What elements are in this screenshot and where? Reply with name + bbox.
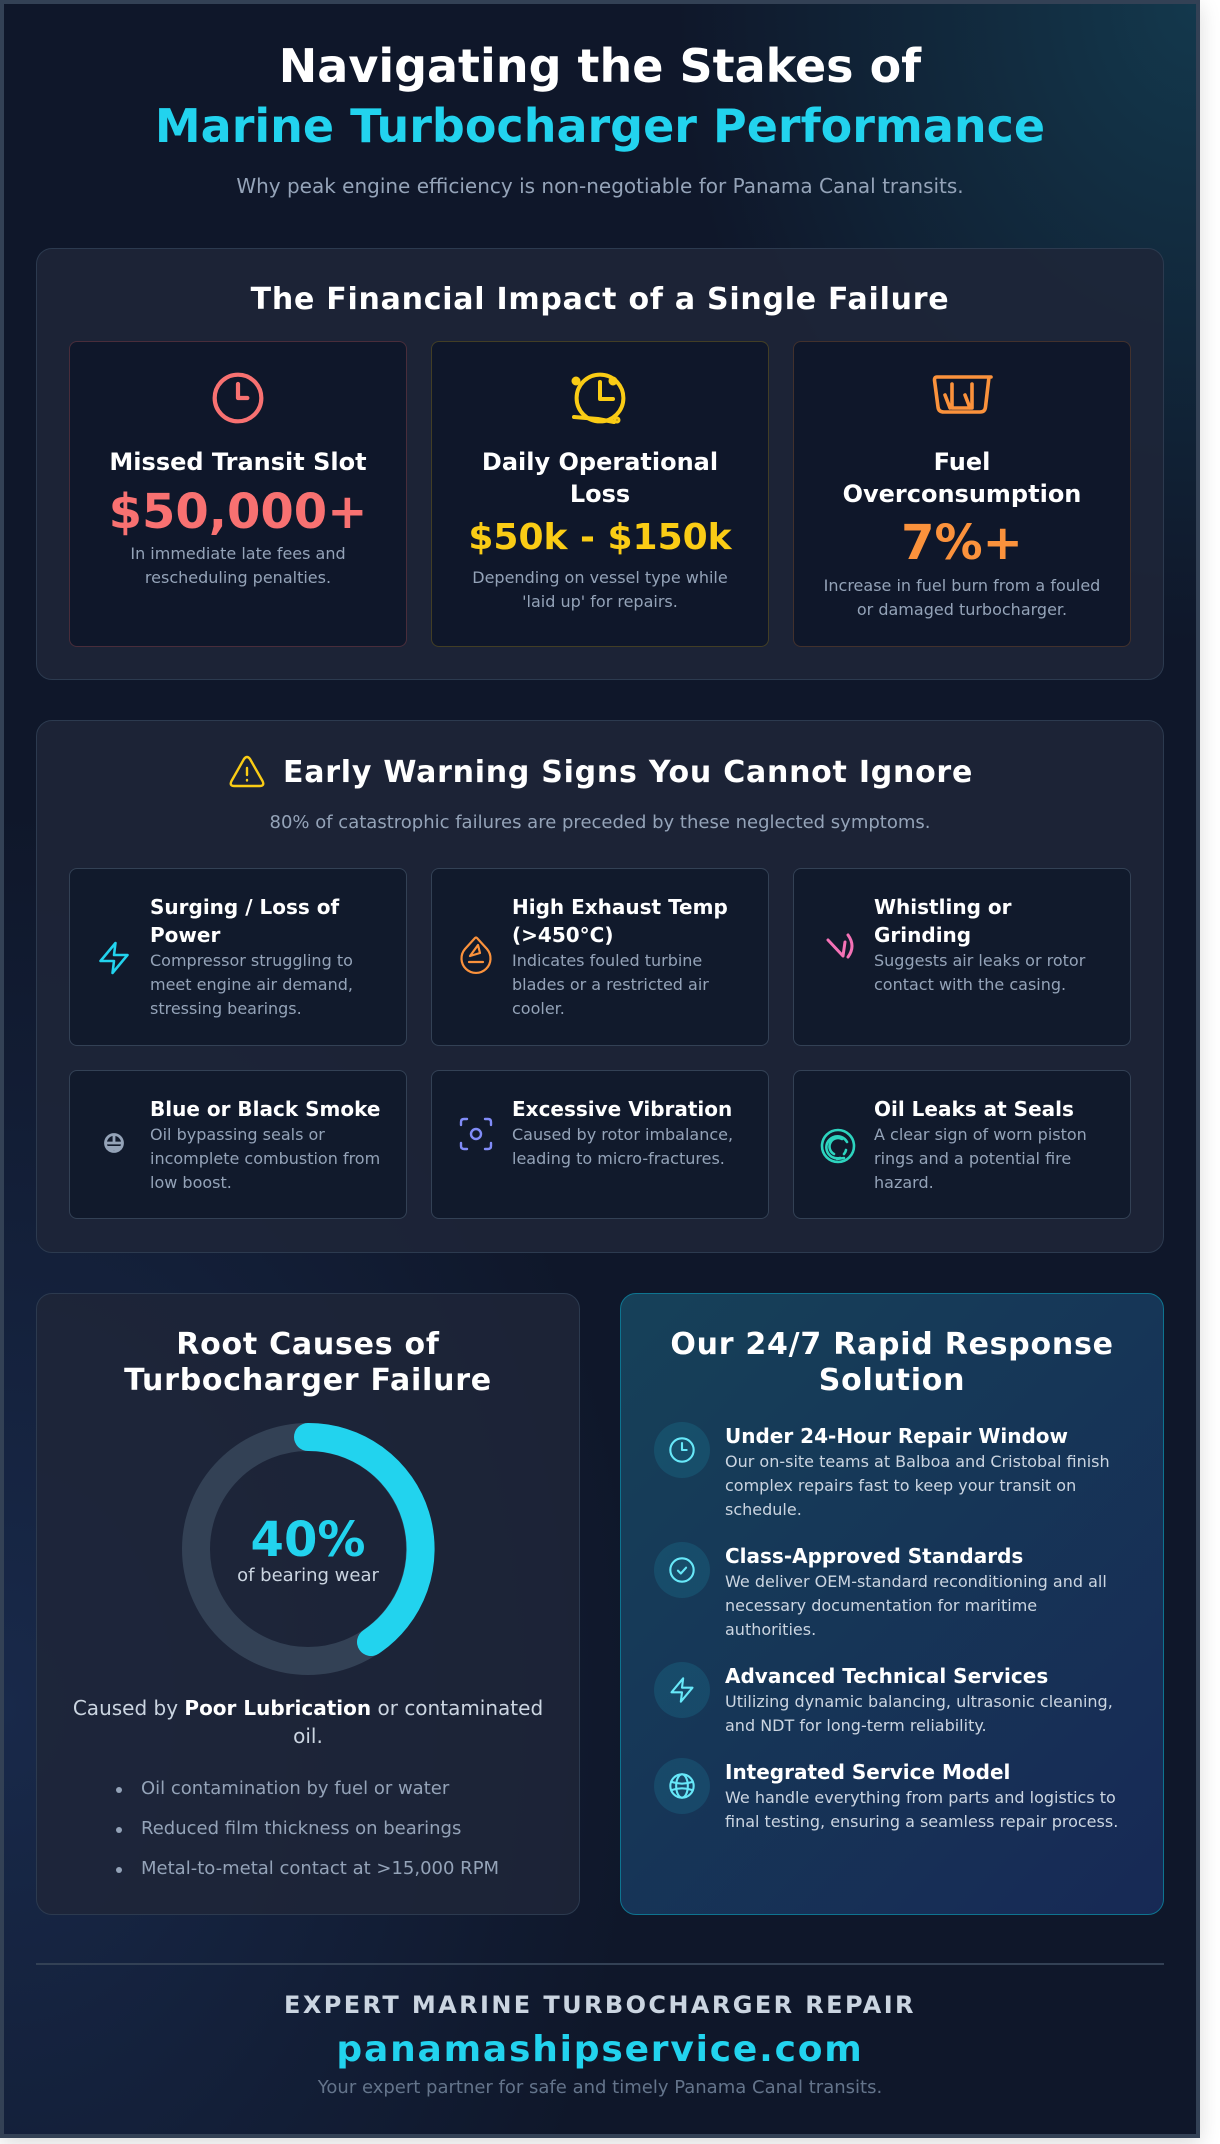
website: panamashipservice.com [336,2029,864,2070]
card: missed transit slot [69,341,407,647]
item: integrated service: Integrated Service Model [725,1760,1010,1784]
item: integrated service [654,1758,1118,1831]
item: class approved: necessary documentation for maritime [725,1596,1037,1615]
card: whistling: Whistling or Grinding [874,895,1011,947]
caption: Caused by Poor Lubrication or contaminated oil. [73,1696,543,1748]
heading: rapid response: Our 24/7 Rapid Response Solution [670,1327,1114,1398]
card: vibration: Caused by rotor imbalance, leading to micro-fractures. [512,1125,733,1168]
icon: warning triangle [230,756,264,788]
card: missed transit slot: Missed Transit Slot [109,448,367,476]
card: daily operational loss: Depending on vessel type while [472,568,728,587]
panel: early warning signs [36,720,1164,1253]
item: advanced technical [654,1662,1113,1735]
icon: fuel tank [932,375,993,414]
heading: root causes: Root Causes of [176,1327,440,1362]
card: daily operational loss [431,341,769,647]
title [155,39,1045,153]
card: vibration [431,1070,769,1219]
card: daily operational loss: Daily Operational [482,448,718,476]
card: fuel overconsumption: 7%+ [901,515,1023,571]
card: exhaust temp: Indicates fouled turbine blades or a restricted air cooler. [512,951,709,1018]
card: vibration: Excessive Vibration [512,1097,732,1121]
card: fuel overconsumption [793,341,1131,647]
bullet list [116,1778,499,1879]
card: oil leaks: A clear sign of worn piston rings and a potential fire hazard. [874,1125,1087,1192]
item: under 24-hour: schedule. [725,1500,802,1519]
card: oil leaks: Oil Leaks at Seals [874,1097,1074,1121]
card: missed transit slot: In immediate late fees and rescheduling penalties. [130,544,346,587]
card: smoke: Oil bypassing seals or incomplete combustion from low boost. [150,1125,380,1192]
footer note: Your expert partner for safe and timely Panama Canal transits. [318,2077,882,2098]
icon: clock [654,1422,710,1478]
item: advanced technical: Advanced Technical Services [725,1664,1048,1688]
panel: rapid response solution [620,1293,1164,1915]
card: whistling: Suggests air leaks or rotor contact with the casing. [874,951,1085,994]
icon: clock [212,372,264,424]
donut value: 40% [251,1512,365,1568]
heading: early warning signs: Early Warning Signs You Cannot Ignore [283,755,973,790]
item: class approved: We deliver OEM-standard reconditioning and all [725,1572,1107,1591]
donut label: of bearing wear [237,1565,379,1586]
card: exhaust temp [431,868,769,1046]
item: class approved [654,1542,1107,1639]
title: Marine Turbocharger Performance [155,99,1045,153]
bullet list: Oil contamination by fuel or water [141,1778,449,1799]
bullet list: Metal-to-metal contact at >15,000 RPM [141,1858,499,1879]
icon: seal rings [820,1128,856,1164]
heading: financial impact: The Financial Impact of a Single Failure [251,282,949,317]
subheading: 80% of catastrophic failures are preceded by these neglected symptoms. [270,812,930,833]
item: integrated service: final testing, ensuring a seamless repair process. [725,1812,1118,1831]
title: Navigating the Stakes of [279,39,921,93]
item: under 24-hour: Our on-site teams at Balboa and Cristobal finish [725,1452,1110,1471]
icon: flame gauge [460,936,492,974]
item: class approved: authorities. [725,1620,816,1639]
donut chart: 40 percent [182,1423,435,1675]
card: daily operational loss: $50k - $150k [468,517,732,558]
item: advanced technical: and NDT for long-term reliability. [725,1716,987,1735]
card: fuel overconsumption: Overconsumption [843,480,1081,508]
icon: bolt [99,942,129,974]
footer [36,1963,1164,2113]
item: under 24-hour: Under 24-Hour Repair Window [725,1424,1068,1448]
card: surging: Compressor struggling to meet engine air demand, stressing bearings. [150,951,353,1018]
item: under 24-hour [654,1422,1110,1519]
card: missed transit slot: $50,000+ [109,484,367,540]
icon: scan target [460,1118,492,1150]
icon: globe [654,1758,710,1814]
icon: smoke gauge [104,1133,124,1153]
card: whistling [793,868,1131,1046]
item: integrated service: We handle everything from parts and logistics to [725,1788,1116,1807]
card: surging: Surging / Loss of Power [150,895,339,947]
heading: root causes [124,1327,492,1398]
card: smoke: Blue or Black Smoke [150,1097,380,1121]
item: advanced technical: Utilizing dynamic balancing, ultrasonic cleaning, [725,1692,1113,1711]
card: smoke [69,1070,407,1219]
panel: financial impact [36,248,1164,680]
card: daily operational loss: 'laid up' for repairs. [522,592,678,611]
icon: bolt [654,1662,710,1718]
card: exhaust temp: High Exhaust Temp (>450°C) [512,895,728,947]
item: under 24-hour: complex repairs fast to keep your transit on [725,1476,1076,1495]
card: fuel overconsumption: Fuel [934,448,990,476]
bullet list: Reduced film thickness on bearings [141,1818,461,1839]
icon: alarm clock [572,372,626,424]
card: surging [69,868,407,1046]
item: class approved: Class-Approved Standards [725,1544,1023,1568]
card: fuel overconsumption: Increase in fuel burn from a fouled or damaged turbocharger. [824,576,1100,619]
footer tagline: EXPERT MARINE TURBOCHARGER REPAIR [284,1991,916,2019]
icon: check circle [654,1542,710,1598]
card: daily operational loss: Loss [570,480,630,508]
subtitle: Why peak engine efficiency is non-negotiable for Panama Canal transits. [236,174,964,198]
heading: root causes: Turbocharger Failure [124,1363,492,1398]
card: oil leaks [793,1070,1131,1219]
panel: root causes [36,1293,580,1915]
icon: sound waves [826,933,854,959]
